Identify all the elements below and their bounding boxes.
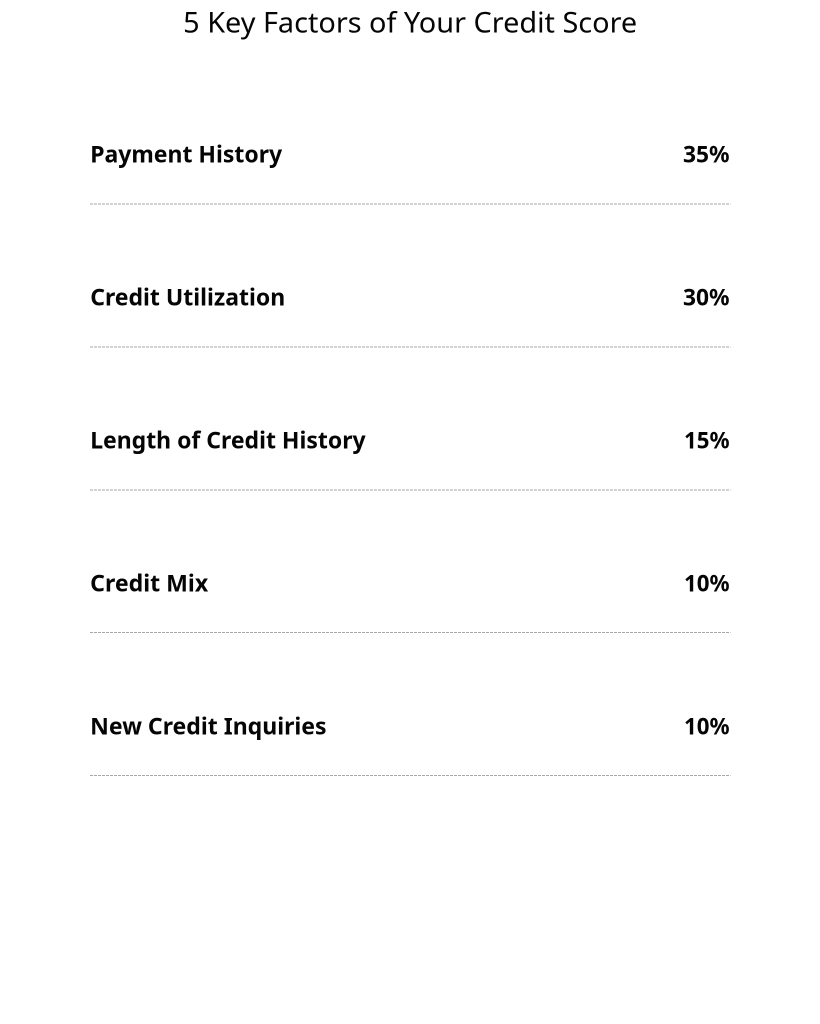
label: payment history: Payment History bbox=[90, 138, 283, 170]
row: new credit inquiries bbox=[90, 710, 730, 776]
label: new credit inquiries: New Credit Inquiries bbox=[90, 710, 327, 742]
value: 10%: 10% bbox=[684, 567, 730, 599]
value: 35%: 35% bbox=[683, 138, 730, 170]
value: 15%: 15% bbox=[684, 424, 730, 456]
label: length of credit history: Length of Credit History bbox=[90, 424, 366, 456]
row: credit mix bbox=[90, 567, 730, 632]
label: credit mix: Credit Mix bbox=[90, 567, 209, 599]
value: 10%: 10% bbox=[684, 710, 730, 742]
row: payment history bbox=[90, 138, 730, 204]
label: credit utilization: Credit Utilization bbox=[90, 281, 285, 313]
title: 5 Key Factors of Your Credit Score bbox=[183, 4, 637, 42]
value: 30%: 30% bbox=[683, 281, 730, 313]
row: length of credit history bbox=[90, 424, 730, 490]
row: credit utilization bbox=[90, 281, 730, 347]
